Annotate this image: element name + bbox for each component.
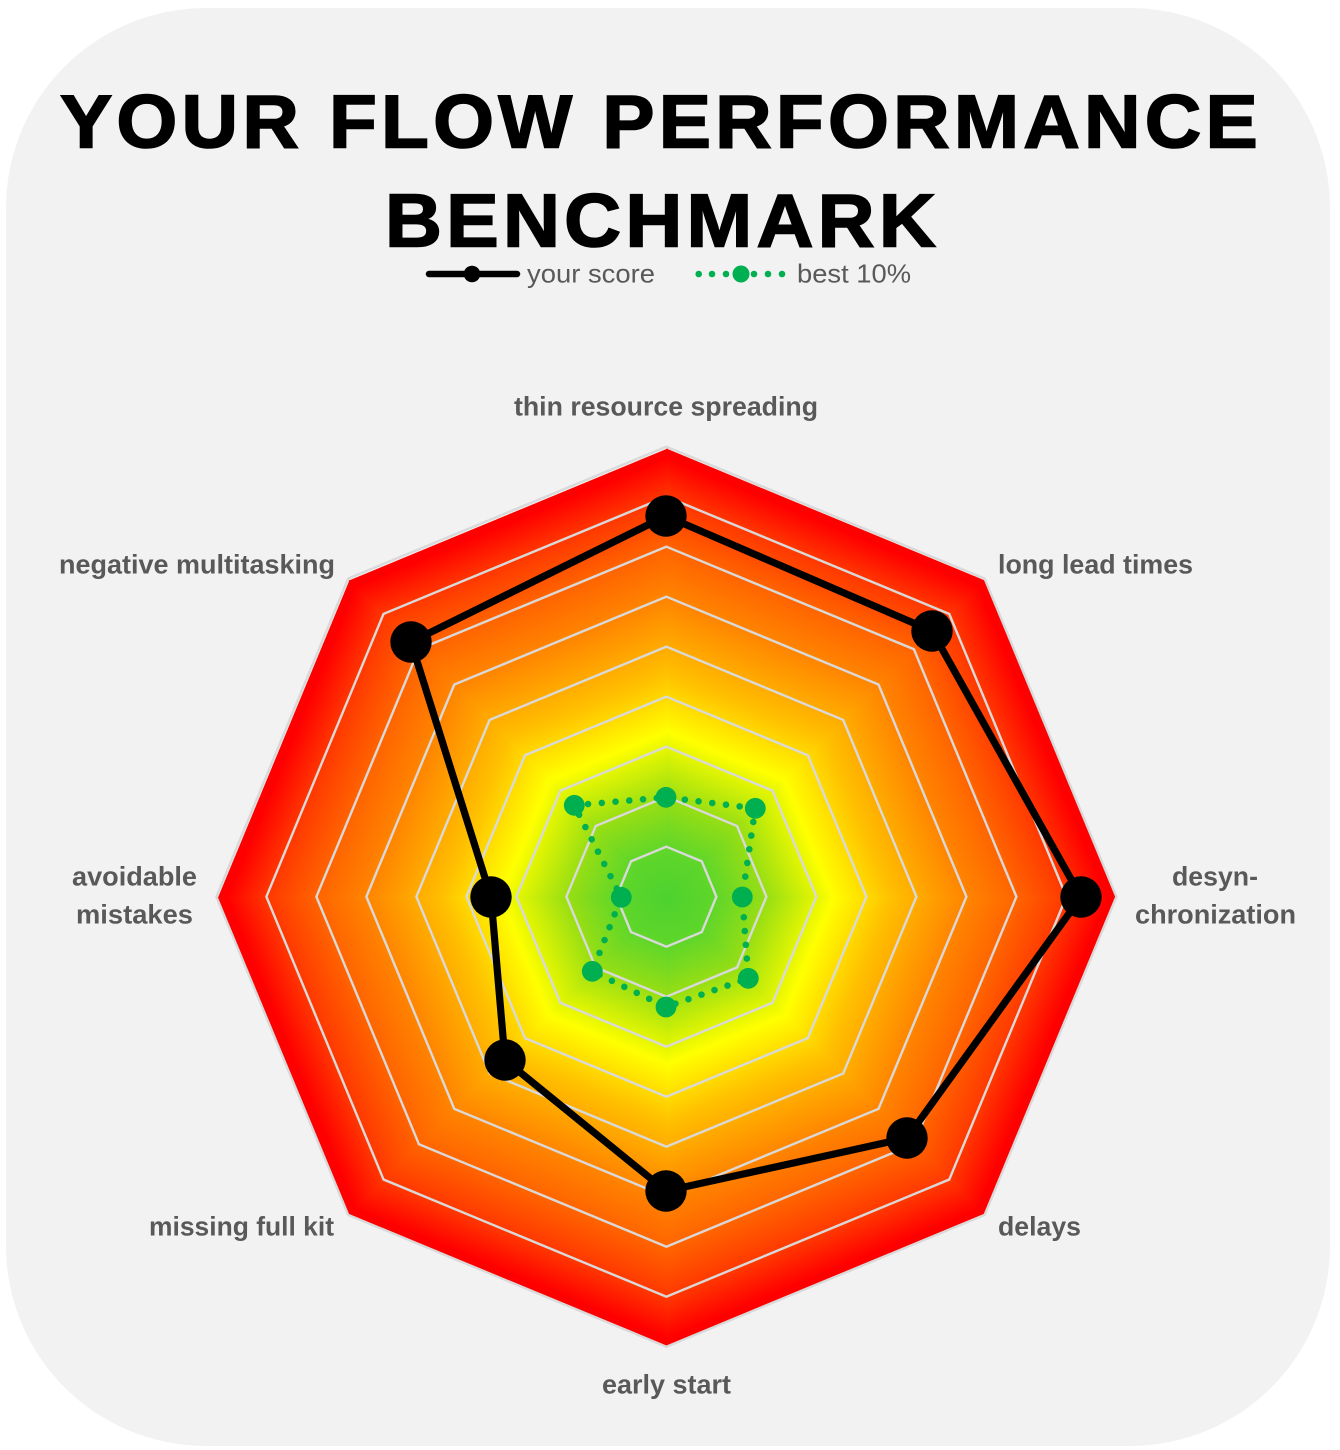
legend: best 10% (695, 258, 911, 288)
label: long lead times: long lead times (998, 550, 1193, 580)
legend: your score: your score (527, 258, 655, 288)
label: avoidable mistakes: mistakes (76, 900, 193, 930)
title (60, 80, 1262, 262)
axis labels (59, 392, 1296, 1400)
label: negative multitasking: negative multitasking (59, 550, 335, 580)
legend: best 10%: best 10% (797, 258, 911, 288)
gradient octagon (218, 449, 1116, 1347)
label: delays: delays (998, 1212, 1081, 1242)
series: best 10% (564, 787, 766, 1017)
label: avoidable mistakes: avoidable (72, 862, 197, 892)
legend (429, 258, 911, 288)
label: thin resource spreading: thin resource spreading (514, 392, 818, 422)
radar grid rings (216, 447, 1116, 1347)
radar chart (59, 392, 1296, 1400)
label: early start: early start (602, 1370, 731, 1400)
title: BENCHMARK (385, 178, 940, 262)
label: desynchronization: desyn- (1172, 862, 1258, 892)
legend: your score (429, 258, 655, 288)
title: YOUR FLOW PERFORMANCE (60, 80, 1262, 164)
label: missing full kit: missing full kit (149, 1212, 334, 1242)
label: desynchronization: chronization (1135, 900, 1296, 930)
series: your score (390, 495, 1102, 1212)
